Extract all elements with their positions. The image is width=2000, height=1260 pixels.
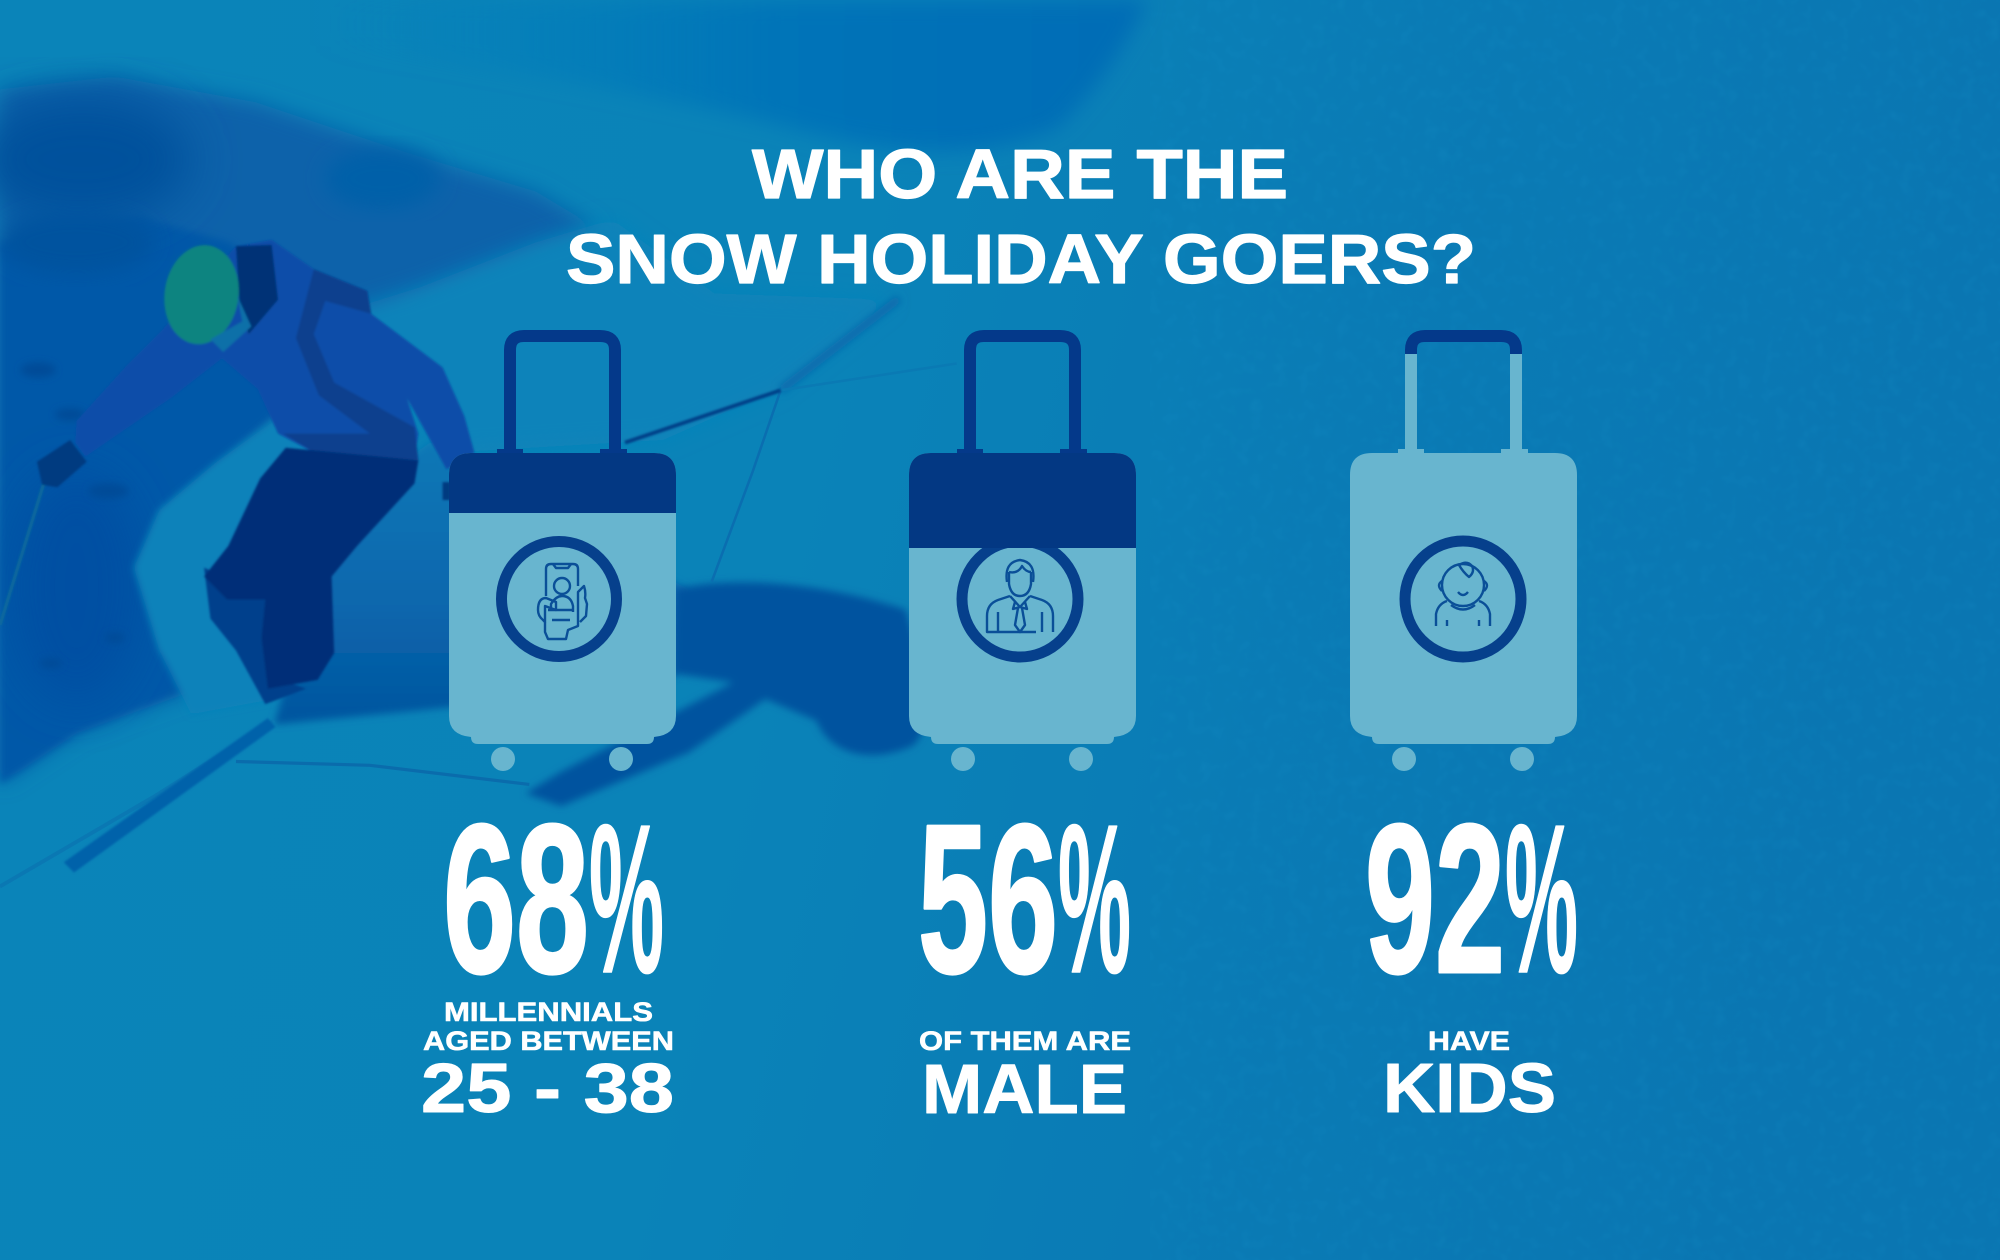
stat: 56 percent: 56 <box>918 780 1058 1017</box>
suitcase 56% <box>909 336 1136 771</box>
suitcase 68% <box>449 336 676 771</box>
label: have kids: KIDS <box>1383 1049 1556 1127</box>
ski pole <box>625 390 781 443</box>
wheels <box>951 747 1093 771</box>
ski <box>64 718 276 872</box>
left pole <box>0 485 43 625</box>
label: millennials: 25 - 38 <box>421 1049 674 1127</box>
handle studs <box>957 449 1087 453</box>
label: have kids: HAVE <box>1428 1026 1510 1056</box>
text: % <box>589 780 664 1017</box>
stat: 68 percent: 68 <box>443 780 589 1017</box>
text: % <box>1505 780 1578 1017</box>
suitcase 92% <box>1350 336 1577 771</box>
goggle <box>210 296 251 352</box>
label: millennials: MILLENNIALS <box>444 997 653 1027</box>
text: % <box>1058 780 1131 1017</box>
wheels <box>1392 747 1534 771</box>
title: WHO ARE THE <box>752 135 1288 213</box>
icon ring <box>962 541 1078 657</box>
jacket <box>75 240 474 469</box>
suitcase body <box>1350 453 1577 744</box>
vest straps and waist <box>283 269 418 460</box>
handle studs <box>497 449 627 453</box>
label: of them are male: OF THEM ARE <box>919 1026 1131 1056</box>
suitcase body <box>909 453 1136 744</box>
stat: 92 percent <box>1365 780 1578 1127</box>
icon ring <box>502 542 616 656</box>
glove <box>37 440 87 487</box>
label: millennials <box>421 997 674 1127</box>
handle top <box>1411 336 1516 354</box>
boots and spray shadow <box>204 568 306 704</box>
filled band <box>909 453 1136 548</box>
collar <box>236 245 278 334</box>
filled band <box>449 453 676 513</box>
wheels <box>491 747 633 771</box>
handle legs <box>1411 354 1516 453</box>
trousers <box>204 448 418 689</box>
right glove <box>443 482 450 500</box>
stat: 92 percent: 92 <box>1365 780 1505 1017</box>
title: SNOW HOLIDAY GOERS? <box>566 220 1476 298</box>
handle <box>970 336 1075 453</box>
icon: phone in hand <box>538 564 587 639</box>
icon: man with tie <box>987 560 1053 632</box>
icon ring <box>1405 541 1521 657</box>
label: millennials: AGED BETWEEN <box>423 1026 674 1056</box>
stat: 56 percent <box>918 780 1131 1128</box>
label: of them are male: MALE <box>922 1050 1127 1128</box>
handle studs <box>1398 449 1528 453</box>
title <box>566 135 1476 298</box>
suitcase body <box>449 453 676 744</box>
stat: 68 percent <box>421 780 674 1127</box>
icon: baby <box>1436 563 1490 626</box>
helmet <box>158 240 245 349</box>
handle <box>510 336 615 453</box>
skier photo figure <box>0 240 781 872</box>
